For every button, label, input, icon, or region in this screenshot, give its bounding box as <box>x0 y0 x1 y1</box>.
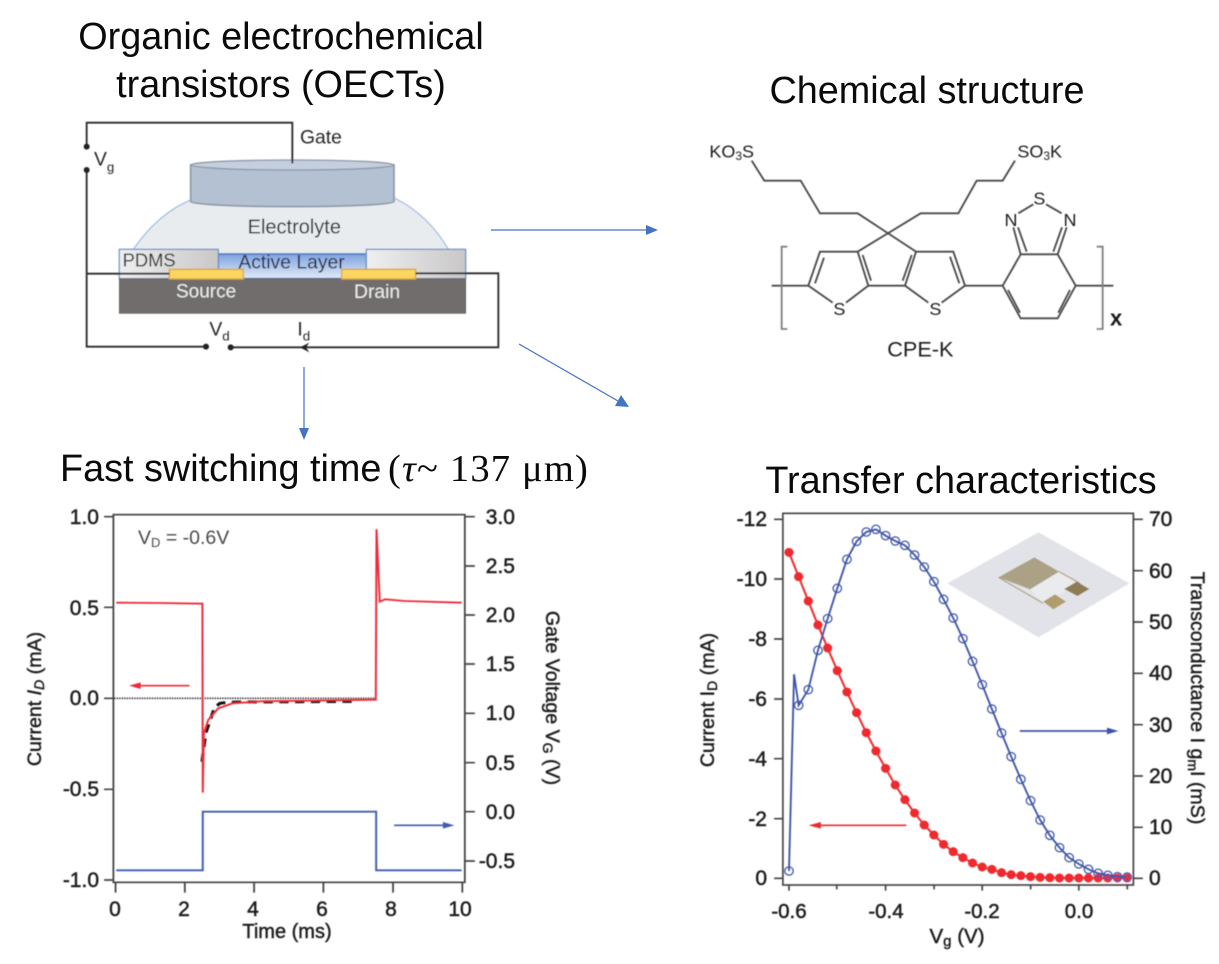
title: organic electrochemical transistors: transistors (OECTs) <box>116 64 446 106</box>
drain electrode <box>342 269 416 279</box>
right axis labels: 0.0 <box>486 801 515 824</box>
right axis labels <box>1149 508 1172 890</box>
panel: chemical structure CPE-K <box>709 141 1123 361</box>
device labels: PDMS <box>123 250 176 271</box>
device labels: Source <box>176 281 236 302</box>
circuit terminals <box>84 144 309 352</box>
plot frame and traces <box>104 515 475 893</box>
atom labels: S <box>742 141 754 161</box>
device labels: I <box>297 319 303 340</box>
current axis title: Current I <box>697 691 719 767</box>
device labels: d <box>222 329 230 344</box>
PDMS right <box>366 249 466 279</box>
device labels: Electrolyte <box>248 216 341 238</box>
right axis labels: 0.5 <box>486 752 515 775</box>
current axis title: (mA) <box>24 632 46 680</box>
gate voltage axis labels: -0.6 <box>771 900 807 923</box>
transconductance axis title: Transconductance I g <box>1186 572 1208 759</box>
gate voltage axis labels: -0.4 <box>868 900 904 923</box>
left axis labels: 0 <box>755 867 767 890</box>
title: organic electrochemical transistors: Organic electrochemical <box>78 16 484 58</box>
gate voltage axis title: (V) <box>541 754 563 785</box>
heading: transfer characteristics: Transfer characteristics <box>765 460 1157 502</box>
blue axis arrow <box>1020 728 1118 734</box>
left axis labels: -6 <box>748 688 767 711</box>
right axis labels: 50 <box>1149 611 1172 634</box>
electrolyte dome <box>133 198 448 258</box>
transconductance axis title: m <box>1185 759 1201 771</box>
drain voltage annotation: = -0.6V <box>160 527 229 549</box>
transconductance markers <box>789 529 1127 877</box>
right axis labels: 30 <box>1149 714 1172 737</box>
time axis labels: 8 <box>385 898 397 921</box>
panel: transfer characteristics chart <box>697 508 1208 950</box>
device labels: V <box>209 319 222 340</box>
gate voltage axis title: Gate Voltage V <box>541 611 563 743</box>
device labels <box>94 128 400 344</box>
atom labels: K <box>1050 141 1062 161</box>
right axis labels: -0.5 <box>479 850 515 873</box>
left axis labels <box>63 506 99 892</box>
left axis labels <box>737 508 767 890</box>
atom labels: N <box>1004 210 1017 230</box>
source electrode <box>169 269 243 279</box>
arrow: device to chemical structure <box>491 225 658 235</box>
right axis labels: 1.5 <box>486 653 515 676</box>
polymer brackets <box>782 247 1103 329</box>
gate voltage axis title: g <box>943 933 952 950</box>
inset: device photo <box>947 532 1129 637</box>
left axis labels: -10 <box>737 568 767 591</box>
atom labels: N <box>1063 210 1076 230</box>
panel: switching time chart <box>24 506 563 943</box>
right axis labels: 0 <box>1149 867 1161 890</box>
right axis labels: 10 <box>1149 816 1172 839</box>
current axis title: Current I <box>24 690 46 766</box>
device labels: Gate <box>300 128 342 149</box>
right axis labels: 2.0 <box>486 604 515 627</box>
time axis labels <box>109 898 472 921</box>
left axis labels: -1.0 <box>63 869 99 892</box>
right axis labels: 2.5 <box>486 555 515 578</box>
left axis labels: 0.0 <box>70 687 99 710</box>
gate voltage axis title: V <box>929 925 943 948</box>
time axis labels: 4 <box>247 898 259 921</box>
atom labels: 3 <box>1043 149 1050 163</box>
active layer <box>218 254 366 279</box>
heading: fast switching time: (τ~ 137 μm) <box>388 448 589 490</box>
red axis arrow <box>129 682 189 689</box>
device labels: Drain <box>354 282 400 303</box>
current axis title: D <box>704 681 720 691</box>
transconductance line <box>789 529 1127 877</box>
left axis labels: 1.0 <box>70 506 99 529</box>
device labels: g <box>107 159 114 174</box>
right axis labels: 1.0 <box>486 702 515 725</box>
heading: fast switching time: Fast switching time <box>60 448 381 490</box>
substrate <box>119 279 466 313</box>
time axis labels: 10 <box>448 898 472 921</box>
current axis title: D <box>31 680 47 690</box>
time axis title: Time (ms) <box>242 921 332 943</box>
panel: OECT device schematic <box>84 123 498 352</box>
left axis labels: -4 <box>748 748 767 771</box>
fit curve <box>202 701 358 762</box>
time axis labels: 0 <box>109 898 121 921</box>
PDMS left <box>119 249 218 279</box>
atom labels: S <box>1033 189 1045 209</box>
right axis labels: 40 <box>1149 662 1172 685</box>
right axis labels <box>479 506 515 873</box>
heading: chemical structure: Chemical structure <box>769 70 1085 112</box>
atom labels: x <box>1110 305 1123 330</box>
device labels: Active Layer <box>238 253 345 274</box>
left axis labels: -0.5 <box>63 778 99 801</box>
gate voltage axis title: (V) <box>952 925 985 948</box>
transconductance axis title: I (mS) <box>1186 771 1208 824</box>
molecule bonds <box>752 161 1113 318</box>
atom labels: KO <box>709 141 735 161</box>
blue axis arrow <box>394 822 454 829</box>
gate voltage trace <box>116 812 462 870</box>
right axis labels: 60 <box>1149 560 1172 583</box>
current axis title: (mA) <box>697 633 719 681</box>
atom labels: CPE-K <box>887 336 954 361</box>
left axis labels: -12 <box>737 508 767 531</box>
time axis labels: 2 <box>178 898 190 921</box>
right axis labels: 20 <box>1149 765 1172 788</box>
left axis labels: -8 <box>748 628 767 651</box>
atom labels <box>709 141 1123 361</box>
red axis arrow <box>809 822 906 829</box>
drain current series <box>789 552 1127 878</box>
left axis labels: -2 <box>748 808 767 831</box>
gate voltage axis labels: -0.2 <box>964 900 1000 923</box>
drain voltage annotation: V <box>138 527 151 549</box>
atom labels: S <box>833 299 845 319</box>
atom labels: SO <box>1017 141 1043 161</box>
plot frame and data <box>774 513 1143 891</box>
left axis labels: 0.5 <box>70 597 99 620</box>
right axis labels: 3.0 <box>486 506 515 529</box>
right axis labels: 70 <box>1149 508 1172 531</box>
circuit wires <box>87 123 498 347</box>
arrow: device to transfer characteristics <box>519 344 629 407</box>
gate voltage axis labels <box>771 900 1093 923</box>
atom labels: S <box>929 299 941 319</box>
gate voltage axis labels: 0.0 <box>1065 900 1093 923</box>
arrow: device to switching time <box>299 367 309 440</box>
time axis labels: 6 <box>316 898 328 921</box>
drain current trace <box>116 529 462 793</box>
zero baseline <box>114 696 376 701</box>
gate electrode <box>191 160 394 207</box>
atom labels: 3 <box>735 149 742 163</box>
device labels: d <box>303 329 310 344</box>
drain voltage annotation: D <box>151 535 160 550</box>
device labels: V <box>94 149 107 170</box>
gate voltage axis title: G <box>540 743 556 754</box>
